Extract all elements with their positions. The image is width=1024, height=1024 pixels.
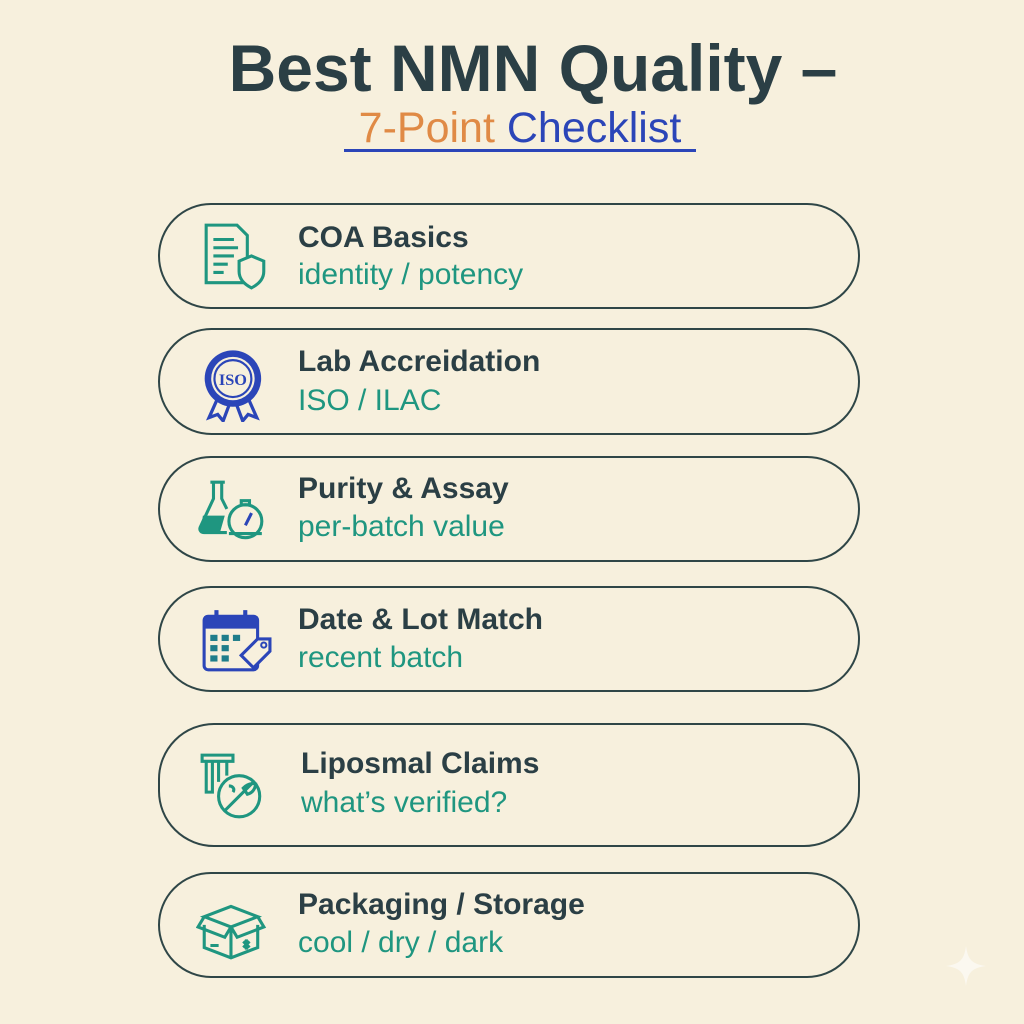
text: what’s verified? [301, 786, 507, 819]
icon: document shield [204, 224, 266, 290]
heading: Lab Accreidation [298, 345, 540, 378]
text: ISO / ILAC [298, 384, 441, 417]
heading: COA Basics [298, 221, 469, 254]
icon: pillar globe [200, 754, 262, 818]
panel: packaging [158, 872, 860, 978]
panel: liposomal [158, 723, 860, 847]
heading: Packaging / Storage [298, 888, 585, 921]
icon: box [196, 904, 266, 960]
panel: date & lot [158, 586, 860, 692]
panel: COA basics [158, 203, 860, 309]
heading: Date & Lot Match [298, 603, 543, 636]
text: recent batch [298, 641, 463, 674]
icon: ISO badge [204, 350, 262, 422]
heading: Purity & Assay [298, 472, 509, 505]
subtitle: 7-Point Checklist [359, 104, 681, 152]
text: identity / potency [298, 258, 523, 291]
icon: ISO badge: ISO [219, 370, 247, 389]
title: Best NMN Quality – [229, 31, 837, 105]
panel: purity [158, 456, 860, 562]
icon: flask and gauge [198, 480, 264, 540]
heading: Liposmal Claims [301, 747, 539, 780]
panel: lab accreditation [158, 328, 860, 435]
icon: sparkle [948, 948, 984, 985]
text: per-batch value [298, 510, 505, 543]
icon: calendar tag [202, 610, 272, 672]
text: cool / dry / dark [298, 926, 503, 959]
